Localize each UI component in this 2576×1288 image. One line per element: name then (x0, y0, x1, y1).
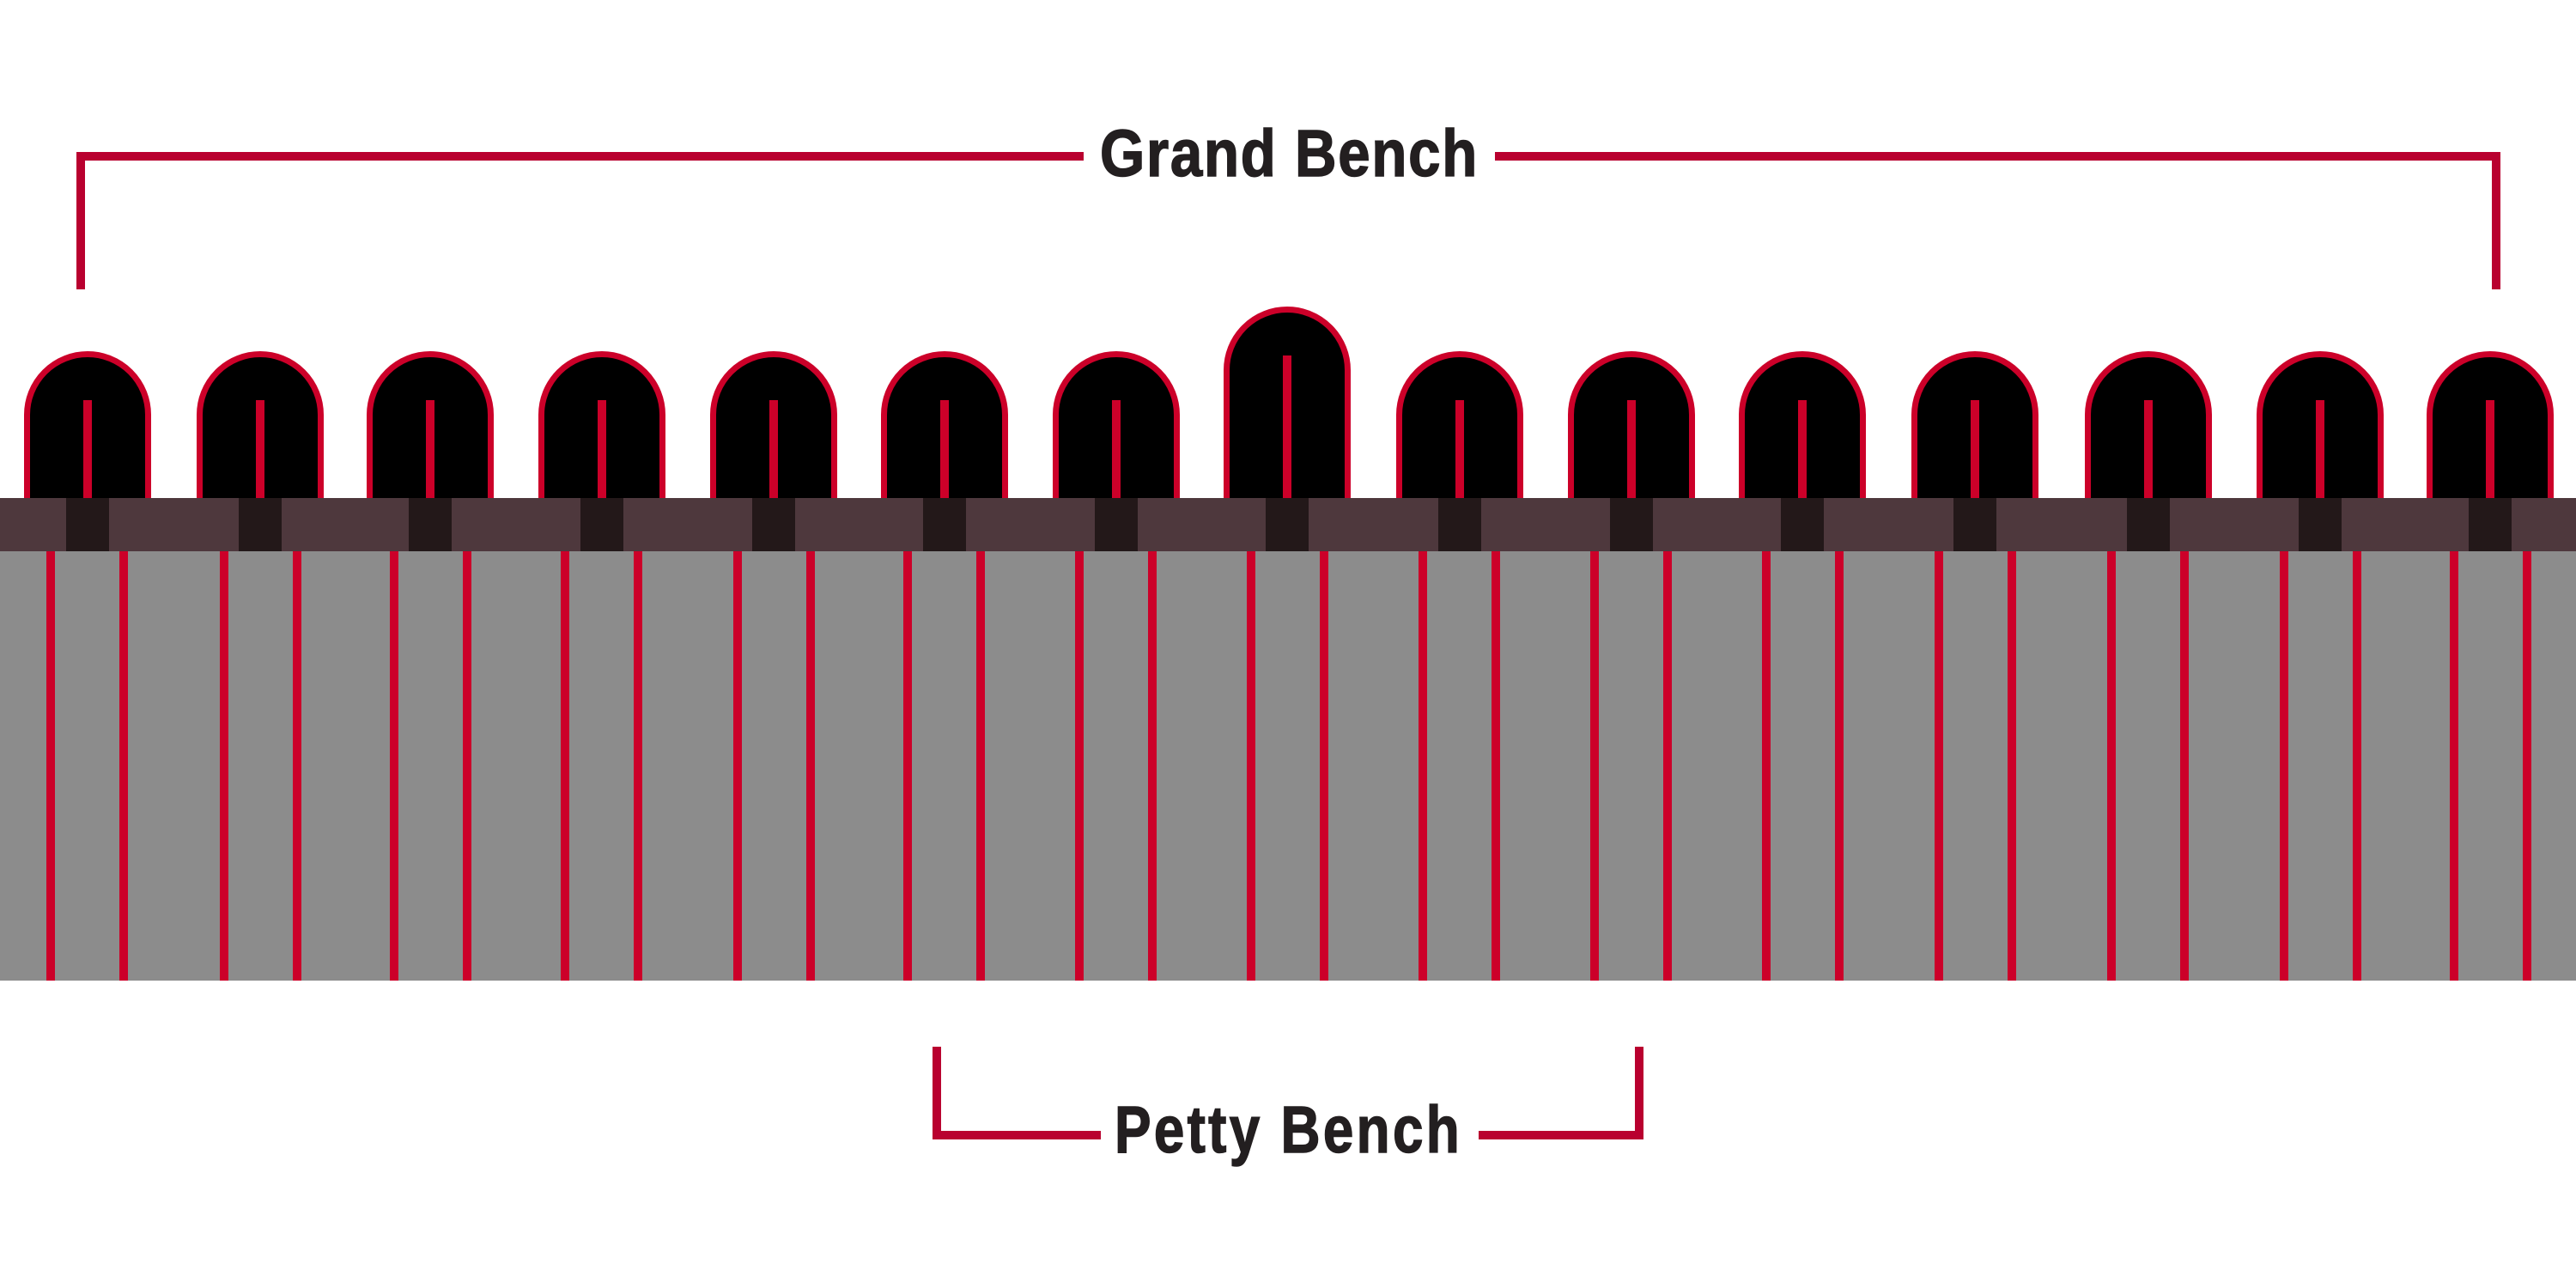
gray block with red vertical lines (0, 551, 2576, 981)
heading: Petty Bench with bracket (937, 1047, 1639, 1167)
heading: Grand Bench with bracket (81, 117, 2496, 289)
band with dark joints (0, 498, 2576, 551)
row of fifteen domes (27, 310, 2550, 502)
heading: Grand Bench with bracket: Grand Bench (1100, 117, 1479, 191)
heading: Petty Bench with bracket: Petty Bench (1115, 1093, 1462, 1167)
